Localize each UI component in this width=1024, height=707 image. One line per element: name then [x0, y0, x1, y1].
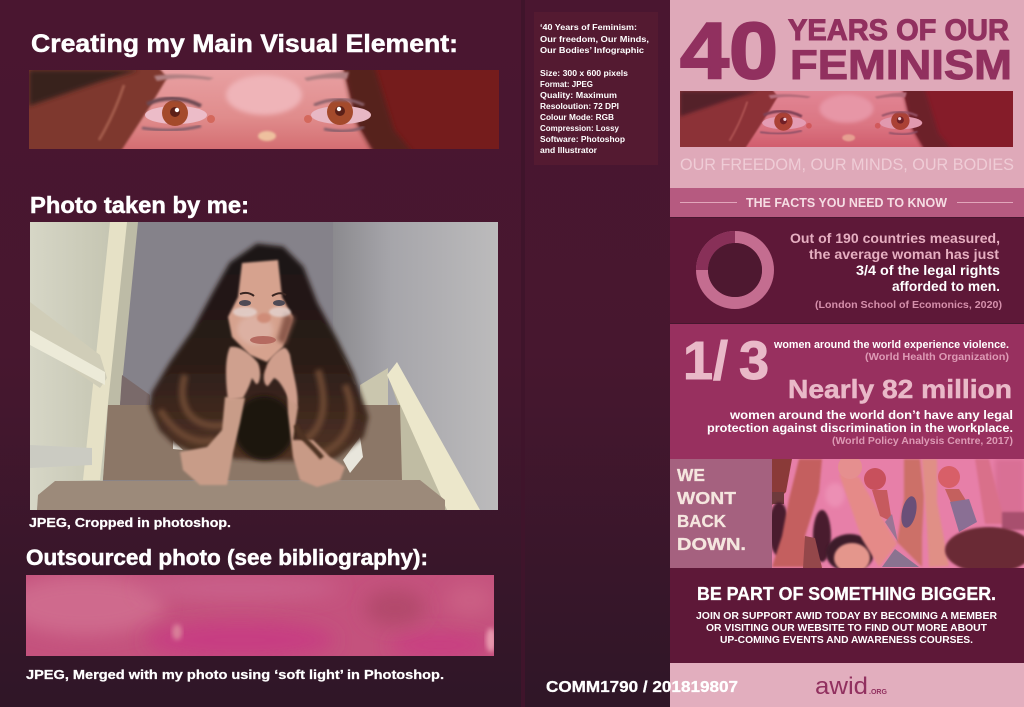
- caption: cropped in photoshop: JPEG, Cropped in photoshop.: [29, 515, 231, 530]
- discrimination text: women around the world don’t have any legal: [729, 408, 1013, 422]
- title line: feminism: FEMINISM: [790, 41, 1012, 88]
- specification text: Format: JPEG: [540, 79, 593, 89]
- specification text: Software: Photoshop: [540, 134, 625, 144]
- logo: awid: [815, 673, 888, 700]
- hands: [226, 347, 260, 400]
- source: WHO: (World Health Organization): [865, 351, 1009, 363]
- slogan box: WE: [677, 465, 705, 485]
- panel divider: [521, 0, 525, 707]
- face: [228, 260, 293, 362]
- image: pink watercolour texture: [5, 575, 496, 658]
- legal rights statistic: Out of 190 countries measured,: [790, 230, 1000, 246]
- footer band: [670, 663, 1024, 707]
- hair: [150, 244, 368, 462]
- call to action body: [696, 610, 997, 646]
- specification text: Colour Mode: RGB: [540, 112, 614, 122]
- slogan box: BACK: [677, 511, 726, 531]
- call to action body: OR VISITING OUR WEBSITE TO FIND OUT MORE ABOUT: [706, 622, 988, 634]
- band: facts you need to know: [670, 188, 1024, 217]
- image: merged eyes strip: [24, 65, 504, 154]
- right arm: [287, 387, 345, 487]
- panel: violence and discrimination: [670, 324, 1024, 459]
- specification text: [540, 22, 649, 155]
- photo: girl on stairs: [30, 222, 498, 510]
- title number 40: 40: [680, 6, 778, 95]
- specification text: Quality: Maximum: [540, 90, 617, 100]
- title line: years of our: YEARS OF OUR: [788, 14, 1009, 47]
- band: facts you need to know: THE FACTS YOU NEED TO KNOW: [746, 196, 947, 210]
- specification text: Resoloution: 72 DPI: [540, 101, 619, 111]
- slogan box: [670, 459, 772, 568]
- specification text: Our freedom, Our Minds,: [540, 34, 649, 44]
- specification text: Size: 300 x 600 pixels: [540, 68, 628, 78]
- source: world policy: (World Policy Analysis Centre, 2017): [832, 435, 1013, 447]
- student reference: COMM1790 / 201819807: [546, 679, 738, 696]
- slogan box: DOWN.: [677, 534, 746, 554]
- call to action heading: BE PART OF SOMETHING BIGGER.: [697, 584, 996, 604]
- logo: awid: .ORG: [869, 689, 888, 696]
- logo: awid: awid: [815, 673, 868, 700]
- discrimination text: protection against discrimination in the workplace.: [707, 421, 1013, 435]
- legal rights statistic: (London School of Ecomonics, 2020): [815, 299, 1002, 311]
- donut chart: three quarters: [702, 237, 768, 303]
- legal rights statistic: [790, 230, 1002, 311]
- left arm: [180, 397, 245, 485]
- image: protest raised fists: [769, 455, 1024, 573]
- violence text: women around the world experience violence.: [773, 339, 1009, 351]
- discrimination text: [707, 408, 1013, 435]
- big stat: nearly 82 million: Nearly 82 million: [788, 374, 1012, 404]
- panel: file specification: [534, 12, 658, 165]
- big stat: one third: 1/3: [683, 331, 769, 391]
- legal rights statistic: the average woman has just: [809, 246, 999, 262]
- slogan box: WONT: [677, 488, 736, 508]
- heading: creating main visual element: Creating my Main Visual Element:: [31, 30, 458, 58]
- specification text: Our Bodies’ Infographic: [540, 45, 644, 55]
- call to action body: JOIN OR SUPPORT AWID TODAY BY BECOMING A MEMBER: [696, 610, 997, 622]
- caption: merged with soft light: JPEG, Merged with my photo using ‘soft light’ in Photoshop.: [26, 667, 444, 682]
- specification text: Compression: Lossy: [540, 123, 619, 133]
- specification text: and Illustrator: [540, 145, 598, 155]
- call to action body: UP-COMING EVENTS AND AWARENESS COURSES.: [720, 634, 973, 646]
- infographic: 40 years of our feminism: [670, 0, 1024, 707]
- legal rights statistic: afforded to men.: [892, 278, 1000, 294]
- specification text: ‘40 Years of Feminism:: [540, 22, 637, 32]
- legal rights statistic: 3/4 of the legal rights: [856, 262, 1000, 278]
- panel: call to action: [670, 568, 1024, 663]
- heading: photo taken by me: Photo taken by me:: [30, 192, 249, 218]
- subtitle: OUR FREEDOM, OUR MINDS, OUR BODIES: [680, 156, 1014, 174]
- heading: outsourced photo: Outsourced photo (see bibliography):: [26, 545, 428, 570]
- image: tinted eyes strip: [676, 87, 1017, 151]
- panel: legal rights: [670, 218, 1024, 323]
